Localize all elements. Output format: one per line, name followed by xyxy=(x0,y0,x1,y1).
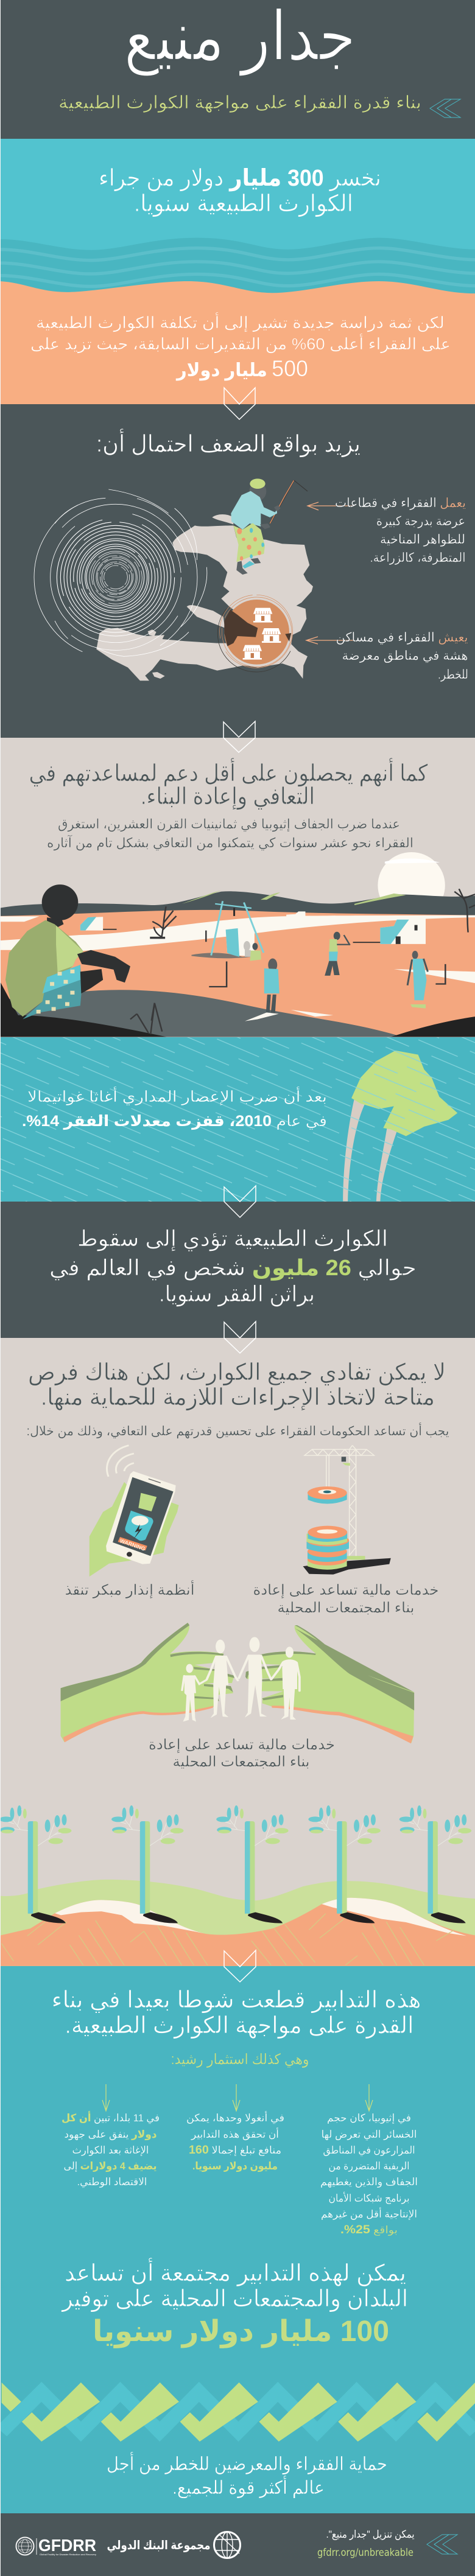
subheading: smart investment: وهي كذلك استثمار رشيد: xyxy=(171,2051,309,2068)
figure: mother xyxy=(239,1637,271,1718)
heading: less support: التعافي وإعادة البناء. xyxy=(141,784,315,810)
panel: wise investment xyxy=(1,1966,475,2513)
column: 11 countries: الإغاثة بعد الكوارث xyxy=(72,2144,149,2156)
text: Agatha Guatemala xyxy=(22,1086,327,1130)
heading: 300 billion xyxy=(99,166,381,217)
column: Ethiopia: برنامج شبكات الأمان xyxy=(329,2192,409,2205)
column: Ethiopia xyxy=(320,2112,418,2236)
family of four xyxy=(182,1637,300,1721)
text: work in exposed sectors: يعمل الفقراء في قطاعات xyxy=(335,496,466,510)
closing message: عالم أكثر قوة للجميع. xyxy=(172,2475,325,2499)
illustration: saplings on hills xyxy=(0,1805,475,1966)
caption: financial services repeated: خدمات مالية تساعد على إعادة xyxy=(149,1737,335,1754)
heading: resilience gains xyxy=(51,1987,421,2039)
text: Agatha Guatemala: بعد أن ضرب الإعصار المداري أغاثا غواتيمالا xyxy=(27,1086,327,1105)
title: جدار منيع xyxy=(124,0,356,77)
heading: less support: كما أنهم يحصلون على أقل دعم لمساعدتهم في xyxy=(29,758,428,787)
chevron: section 5 to 6 xyxy=(224,1950,256,1982)
figure: father xyxy=(207,1640,237,1718)
column: Angola: أن تحقق هذه التدابير xyxy=(191,2127,279,2140)
logo: World Bank Group xyxy=(107,2532,240,2558)
figure: man with hoe xyxy=(326,932,350,975)
text: work in exposed sectors xyxy=(335,496,466,565)
heading: resilience gains: هذه التدابير قطعت شوطا بعيدا في بناء xyxy=(51,1987,421,2014)
logo: GFDRR: GFDRR xyxy=(38,2536,96,2555)
heading: less support xyxy=(29,758,428,810)
illustration: drought landscape xyxy=(1,852,475,1037)
warning label: WARNING xyxy=(119,1538,146,1552)
text: live in fragile housing: هشة في مناطق معرضة xyxy=(342,649,468,663)
heading: opportunities xyxy=(28,1360,446,1411)
text: 500 billion xyxy=(30,312,451,381)
text: Ethiopia drought: عندما ضرب الجفاف إثيوبيا في ثمانينيات القرن العشرين، استغرق xyxy=(58,816,400,832)
panel: storm in Guatemala xyxy=(1,1037,475,1202)
illustration: phone early warning xyxy=(90,1446,179,1577)
column: Angola: في أنغولا وحدها، يمكن xyxy=(186,2111,284,2124)
heading: opportunities: لا يمكن تفادي جميع الكوارث، لكن هناك فرص xyxy=(28,1360,446,1386)
figure: grandparent xyxy=(272,1647,300,1720)
arrows: down xyxy=(102,2084,373,2111)
text: live in fragile housing: يعيش الفقراء في مساكن xyxy=(336,631,468,645)
seated figure xyxy=(5,884,130,1020)
logo: GFDRR: Global Facility for Disaster Reduction and Recovery xyxy=(40,2553,96,2556)
text: Ethiopia drought xyxy=(47,816,413,851)
column: 11 countries: الاقتصاد الوطني. xyxy=(77,2176,147,2188)
icon: farmer with hoe xyxy=(231,478,308,575)
illustration: crane with coins xyxy=(303,1446,391,1575)
icon: triple chevron xyxy=(430,99,460,117)
column: Ethiopia: الجفاف والذين يغطيهم xyxy=(320,2176,418,2188)
illustration: protective hands with family xyxy=(61,1623,414,1743)
caption: financial services repeated: بناء المجتمعات المحلية xyxy=(173,1754,309,1770)
heading: vulnerability: يزيد بواقع الضعف احتمال أن: xyxy=(96,429,361,458)
heading: resilience gains: القدرة على مواجهة الكوارث الطبيعية. xyxy=(65,2013,414,2039)
column: Angola: منافع تبلغ إجمالا 160 xyxy=(189,2144,281,2157)
column: Ethiopia: الخسائر التي تعرض لها xyxy=(322,2129,417,2141)
caption: early warning systems: أنظمة إنذار مبكر تنقذ xyxy=(65,1580,195,1599)
column: Ethiopia: بواقع 25%. xyxy=(340,2224,398,2236)
download note xyxy=(317,2529,415,2559)
panel: less support xyxy=(1,738,475,1037)
subtitle: بناء قدرة الفقراء على مواجهة الكوارث الطبيعية xyxy=(58,93,421,113)
column: Ethiopia: في إثيوبيا، كان حجم xyxy=(327,2112,411,2124)
map of Haiti xyxy=(34,478,313,681)
figure: child centre xyxy=(245,959,280,1021)
text: live in fragile housing: للخطر. xyxy=(438,668,468,682)
dead trees and posts xyxy=(130,889,475,1034)
panel: footer xyxy=(1,2513,475,2576)
figure: woman walking xyxy=(407,951,427,1009)
heading: opportunities: متاحة لاتخاذ الإجراءات اللازمة للحماية منها. xyxy=(41,1385,435,1411)
heading: 26 million: براثن الفقر سنويا. xyxy=(159,1281,315,1307)
chevron: section 4 to 5 xyxy=(224,1321,256,1353)
column: Angola: مليون دولار سنويا. xyxy=(192,2160,278,2172)
panel: title header xyxy=(1,0,475,139)
text: 500 billion: لكن ثمة دراسة جديدة تشير إلى أن تكلفة الكوارث الطبيعية xyxy=(36,312,445,332)
text: work in exposed sectors: للظواهر المناخية xyxy=(380,533,465,547)
stat: 100 billion: 100 مليار دولار سنويا xyxy=(93,2315,389,2348)
text: work in exposed sectors: المتطرفة، كالزراعة. xyxy=(370,551,465,565)
left edge strip xyxy=(0,0,1,2576)
community circle with houses xyxy=(217,595,295,672)
zigzag pattern xyxy=(1,2382,475,2441)
column: 11 countries: في 11 بلدا، تبين أن كل xyxy=(62,2111,160,2124)
column: Ethiopia: الريفية المتضررة من xyxy=(329,2160,409,2172)
caption: financial services xyxy=(253,1582,438,1616)
logo: GFDRR xyxy=(16,2536,96,2556)
well xyxy=(191,901,264,961)
column: Angola xyxy=(186,2111,284,2172)
icon: wind-blown palm trees xyxy=(343,1051,457,1202)
text: work in exposed sectors: عرضة بدرجة كبيرة xyxy=(376,514,465,528)
chevron: section 2 to 3 xyxy=(223,721,255,752)
heading: 26 million: الكوارث الطبيعية تؤدي إلى سقوط xyxy=(77,1226,388,1251)
rain lines xyxy=(1,1037,475,1202)
column: 11 countries: دولار ينفق على جهود xyxy=(65,2129,157,2141)
panel: cost of disasters xyxy=(0,139,475,404)
download note: gfdrr.org/unbreakable xyxy=(317,2547,413,2559)
village houses xyxy=(80,911,426,944)
panel: vulnerability xyxy=(1,404,475,738)
text: governments should help: يجب أن تساعد الحكومات الفقراء على تحسين قدرتهم على التعافي، وذلك من خلال: xyxy=(27,1423,449,1439)
right hand xyxy=(245,1625,414,1743)
chevron: section 3 to 4 xyxy=(224,1186,256,1217)
logo: World Bank Group: مجموعة البنك الدولي xyxy=(107,2539,211,2553)
figure: child xyxy=(182,1664,206,1721)
caption: financial services: بناء المجتمعات المحلية xyxy=(278,1600,414,1616)
heading: 300 billion: الكوارث الطبيعية سنويا. xyxy=(134,191,353,217)
arrow: to farmer note xyxy=(308,502,354,510)
sand band xyxy=(0,281,475,404)
heading: together save xyxy=(61,2258,408,2312)
column: Ethiopia: المزارعون في المناطق xyxy=(323,2144,415,2157)
text: live in fragile housing xyxy=(336,631,468,682)
waves xyxy=(0,238,475,299)
column: Ethiopia: الإنتاجية أقل من غيرهم xyxy=(321,2207,417,2221)
chevron: section 1 to 2 xyxy=(224,388,255,419)
column: 11 countries xyxy=(62,2111,160,2188)
closing message xyxy=(107,2451,387,2499)
panel: measures xyxy=(0,1338,475,1966)
text: Agatha Guatemala: في عام 2010، قفزت معدلات الفقر 14%. xyxy=(22,1113,327,1130)
column: 11 countries: يضيف 4 دولارات إلى xyxy=(63,2160,157,2172)
icon: hurricane spiral xyxy=(34,489,207,659)
left hand xyxy=(61,1623,236,1742)
heading: together save: البلدان والمجتمعات المحلية على توفير xyxy=(61,2286,408,2312)
heading: 26 million: حوالي 26 مليون شخص في العالم في xyxy=(49,1255,417,1281)
heading: together save: يمكن لهذه التدابير مجتمعة أن تساعد xyxy=(65,2258,406,2287)
text: 500 billion: 500 مليار دولار xyxy=(175,356,308,381)
text: 500 billion: على الفقراء أعلى 60% من التقديرات السابقة، حيث تزيد على xyxy=(30,333,451,354)
text: Ethiopia drought: الفقراء نحو عشر سنوات كي يتمكنوا من التعافي بشكل تام من آثاره xyxy=(47,835,413,851)
panel: 26 million xyxy=(1,1202,475,1338)
heading: 300 billion: نخسر 300 مليار دولار من جراء xyxy=(99,166,381,192)
arrow: to housing note xyxy=(306,637,353,644)
caption: financial services: خدمات مالية تساعد على إعادة xyxy=(253,1582,438,1599)
closing message: حماية الفقراء والمعرضين للخطر من أجل xyxy=(107,2451,387,2475)
download note: يمكن تنزيل "جدار منيع". xyxy=(326,2529,415,2541)
icon: triple chevron footer xyxy=(427,2535,457,2554)
caption: financial services repeated xyxy=(149,1737,335,1770)
heading: 26 million xyxy=(49,1226,417,1307)
